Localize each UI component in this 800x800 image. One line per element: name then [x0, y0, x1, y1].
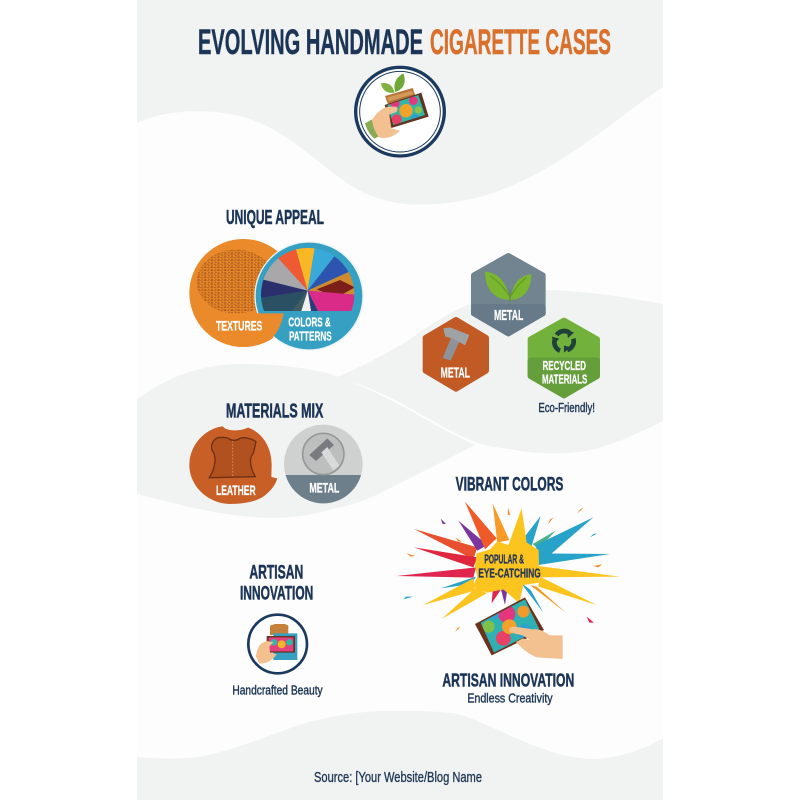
label: textures: TEXTURES: [216, 318, 262, 334]
text: endless creativity: Endless Creativity: [467, 691, 553, 706]
heading: unique appeal: UNIQUE APPEAL: [226, 207, 324, 229]
label: eco-friendly: Eco-Friendly!: [538, 401, 595, 415]
hexagon: recycled materials: [531, 321, 597, 395]
badge: metal: [282, 425, 365, 505]
heading: vibrant colors: VIBRANT COLORS: [456, 475, 563, 496]
panel: material hexagons: [426, 256, 597, 415]
badge: leather: LEATHER: [216, 482, 256, 498]
icon: hand with case: [248, 615, 307, 673]
icon: hand with colorful case: [475, 597, 563, 659]
label: popular and eye-catching: POPULAR &: [484, 551, 524, 566]
panel: unique appeal: [187, 207, 363, 357]
badge: leather: [189, 426, 277, 504]
source line: Source: [Your Website/Blog Name: [314, 769, 482, 786]
heading: artisan innovation two lines: ARTISAN: [249, 562, 303, 583]
burst graphic: [397, 502, 620, 632]
label: popular and eye-catching: [478, 551, 541, 580]
panel: materials mix: [189, 401, 365, 505]
hexagon: hammer metal: [426, 320, 486, 389]
hexagon: recycled materials: MATERIALS: [542, 371, 588, 386]
icon: hand holding case emblem: [356, 67, 444, 156]
badge: metal: METAL: [309, 479, 340, 495]
heading: artisan innovation: ARTISAN INNOVATION: [442, 670, 574, 691]
label: colors and patterns: COLORS &: [288, 315, 331, 330]
label: colors and patterns: PATTERNS: [289, 329, 332, 344]
background panel: [137, 0, 663, 800]
hexagon: leaf metal: METAL: [494, 308, 523, 324]
title: EVOLVING HANDMADE: [198, 23, 423, 62]
heading: artisan innovation two lines: INNOVATION: [240, 583, 313, 604]
icon: recycle: [554, 331, 574, 351]
circle: textures: [189, 239, 278, 347]
label: colors and patterns: [288, 315, 332, 344]
title: CIGARETTE CASES: [430, 23, 611, 62]
label lobe: textures: [193, 313, 284, 347]
hexagon: hammer metal: METAL: [441, 365, 470, 381]
label: popular and eye-catching: EYE-CATCHING: [478, 565, 541, 580]
hexagon: recycled materials: RECYCLED: [543, 358, 586, 373]
text: handcrafted beauty: Handcrafted Beauty: [232, 683, 323, 697]
heading: materials mix: MATERIALS MIX: [226, 401, 324, 423]
heading: artisan innovation two lines: [240, 562, 313, 604]
hexagon: leaf metal: [474, 256, 543, 333]
circle: colors and patterns: [255, 240, 363, 350]
panel: vibrant colors: [397, 475, 620, 706]
panel: artisan innovation: [232, 562, 323, 697]
